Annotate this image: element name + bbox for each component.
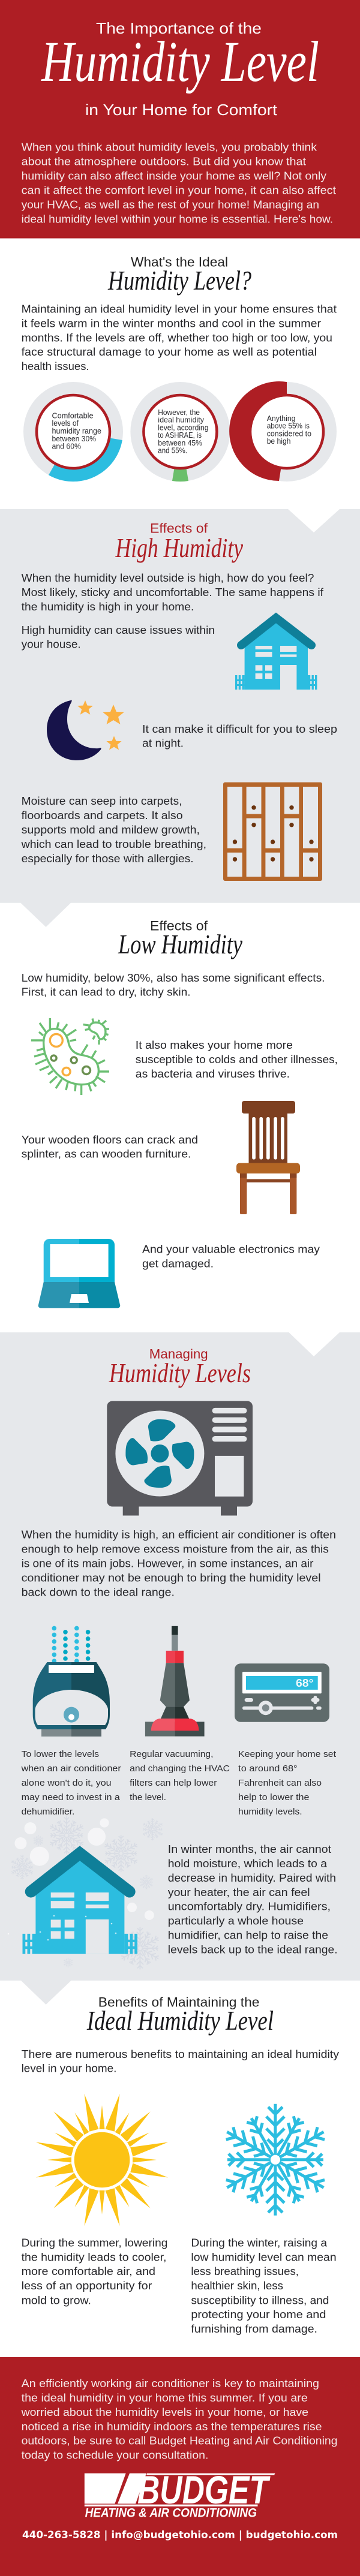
donut: comfortable range: levels of (52, 419, 79, 428)
closing text: the ideal humidity in your home this summer. If you are (22, 2392, 308, 2404)
icon: thermostat: 68° (296, 1677, 313, 1689)
text block: is one of its main jobs. However, in some instances, an air (22, 1558, 313, 1570)
text: moisture: especially for those with allergies. (22, 853, 194, 865)
donut: comfortable range: between 30% (52, 435, 96, 443)
text: moisture: supports mold and mildew growth, (22, 824, 200, 836)
closing text (21, 2378, 338, 2461)
panel: managing humidity levels (0, 1332, 360, 2005)
icon: floorboards (223, 783, 322, 881)
text block: the humidity is high in your home. (22, 601, 194, 613)
text block: There are numerous benefits to maintaining an ideal humidity (22, 2048, 339, 2060)
donut: comfortable range: Comfortable (52, 411, 94, 420)
text: sleep: It can make it difficult for you to sleep (142, 723, 337, 735)
text: sleep (142, 723, 337, 750)
caption: dehumidifier: dehumidifier. (22, 1807, 74, 1817)
text: winter months (168, 1843, 338, 1956)
caption: vacuuming: and changing the HVAC (130, 1764, 230, 1774)
text: sleep: at night. (142, 738, 184, 750)
closing text: An efficiently working air conditioner is key to maintaining (22, 2378, 319, 2390)
heading: What's the Ideal (131, 255, 228, 270)
text block: health issues. (22, 360, 89, 372)
panel: effects of low humidity (22, 918, 338, 1308)
heading: Managing (149, 1347, 208, 1362)
text block: level in your home. (22, 2063, 116, 2075)
heading (118, 918, 242, 959)
caption: vacuuming (130, 1749, 230, 1802)
logo: Budget Heating & Air Conditioning (85, 2467, 275, 2520)
heading: Effects of (150, 521, 208, 536)
closing text: worried about the humidity levels in your home, or have (21, 2406, 308, 2418)
text: winter benefit: healthier skin, less (191, 2280, 283, 2292)
text: electronics (142, 1244, 320, 1270)
caption: thermostat: help to lower the (238, 1792, 310, 1802)
heading: Effects of (150, 918, 208, 933)
text: summer benefit: mold to grow. (22, 2294, 91, 2306)
panel: effects of high humidity (0, 509, 360, 927)
text: winter benefit: protecting your home and (191, 2309, 326, 2321)
panel: benefits (22, 1994, 339, 2335)
text block (22, 2048, 339, 2075)
text: illnesses: It also makes your home more (136, 1039, 293, 1051)
icon: chair (236, 1101, 300, 1214)
text: moisture: Moisture can seep into carpets, (22, 795, 182, 807)
text: winter months: In winter months, the air cannot (168, 1843, 331, 1855)
text block: back down to the ideal range. (22, 1586, 175, 1598)
donut: comfortable range: and 60% (52, 443, 81, 451)
text: winter months: humidifier, can help to raise the (168, 1930, 328, 1942)
text block (22, 572, 324, 613)
icon: dehumidifier (33, 1626, 110, 1737)
donut: high humidity (229, 381, 337, 482)
text: moisture (21, 795, 206, 865)
text: summer benefit (22, 2237, 167, 2306)
donut: high humidity: above 55% is (267, 422, 310, 431)
donut: ideal range: level, according (158, 423, 209, 432)
donut: ideal range: However, the (158, 408, 200, 417)
caption: thermostat: Fahrenheit can also (238, 1778, 322, 1788)
caption: dehumidifier: may need to invest in a (22, 1792, 120, 1802)
heading (107, 255, 251, 296)
text: winter benefit: low humidity level can mean (191, 2251, 337, 2263)
caption: dehumidifier: To lower the levels (22, 1749, 99, 1759)
intro text (22, 142, 336, 225)
intro text: about the atmosphere outdoors. But did you know that (22, 156, 306, 168)
text block: face structural damage to your home as well as potential (22, 346, 317, 358)
heading: Low Humidity (118, 929, 242, 959)
text: summer benefit: the humidity leads to cooler, (22, 2251, 166, 2263)
title: The Importance of the (96, 19, 262, 37)
text block: Low humidity, below 30%, also has some significant effects. (22, 972, 325, 984)
donut: ideal range: ideal humidity (158, 416, 205, 425)
donut: comfortable range: humidity range (52, 427, 101, 435)
panel: intro header (0, 0, 360, 239)
intro text: When you think about humidity levels, you probably think (22, 142, 317, 154)
donut: high humidity: considered to (267, 429, 311, 438)
icon: thermostat (235, 1663, 329, 1722)
closing text: today to schedule your consultation. (22, 2449, 208, 2461)
icon: vacuum (145, 1626, 205, 1737)
text: issues within house: your house. (22, 639, 81, 651)
closing text: outdoors, be sure to call Budget Heating and Air Conditioning (22, 2435, 338, 2447)
text: winter months: decrease in humidity. Paired with (168, 1872, 336, 1884)
heading: Humidity Level? (107, 265, 251, 296)
text: summer benefit: less of an opportunity for (22, 2280, 152, 2292)
text: summer benefit: During the summer, lowering (22, 2237, 167, 2249)
text block: it feels warm in the winter months and cool in the summer (22, 317, 321, 329)
logo: Budget Heating & Air Conditioning: HEATING & AIR CONDITIONING (85, 2506, 257, 2520)
heading (109, 1347, 251, 1388)
intro text: humidity can also affect inside your home as well? Not only (22, 170, 326, 182)
text: electronics: get damaged. (142, 1258, 214, 1270)
title: in Your Home for Comfort (85, 101, 278, 119)
icon: laptop (38, 1239, 120, 1308)
icon: snowy house (8, 1816, 163, 1969)
icon: snowflake (223, 2104, 328, 2216)
text: winter benefit: furnishing from damage. (191, 2323, 317, 2335)
heading: High Humidity (115, 532, 243, 563)
caption: thermostat: Keeping your home set (238, 1749, 337, 1759)
donut: high humidity: be high (267, 437, 291, 446)
text: electronics: And your valuable electronics may (142, 1244, 320, 1256)
icon: sun (35, 2093, 169, 2227)
text: winter months: uncomfortably dry. Humidifiers, (168, 1901, 331, 1913)
caption: thermostat: to around 68° (238, 1764, 298, 1774)
text: winter benefit (191, 2237, 337, 2335)
text block (22, 1529, 336, 1598)
caption: vacuuming: Regular vacuuming, (130, 1749, 214, 1759)
text block: When the humidity is high, an efficient air conditioner is often (22, 1529, 336, 1541)
text: moisture: floorboards and carpets. It also (22, 809, 183, 821)
text block (22, 972, 325, 998)
intro text: can it affect the comfort level in your home, it can also affect (22, 184, 336, 196)
caption: dehumidifier: alone won't do it, you (22, 1778, 112, 1788)
caption: dehumidifier: when an air conditioner (21, 1764, 121, 1774)
donut: ideal range (130, 382, 230, 482)
icon: air conditioner (107, 1401, 253, 1516)
icon: bacteria (31, 1018, 109, 1095)
text block: First, it can lead to dry, itchy skin. (22, 986, 191, 998)
text: winter benefit: During the winter, raising a (191, 2237, 328, 2249)
text: moisture: which can lead to trouble breathing, (21, 838, 206, 850)
caption: thermostat: humidity levels. (238, 1807, 302, 1817)
caption: thermostat (238, 1749, 337, 1817)
donut: comfortable range (23, 382, 123, 482)
donut: high humidity: Anything (267, 414, 296, 423)
caption: vacuuming: the level. (130, 1792, 166, 1802)
panel: what's the ideal humidity level (22, 255, 337, 482)
text block: When the humidity level outside is high, how do you feel? (22, 572, 314, 584)
text block: enough to help remove excess moisture from the air, as this (22, 1543, 329, 1555)
text block (22, 303, 337, 372)
caption: vacuuming: filters can help lower (130, 1778, 217, 1788)
text: winter benefit: less breathing issues, (191, 2265, 299, 2277)
text: wood: Your wooden floors can crack and (22, 1134, 198, 1146)
donut: ideal range: and 55%. (158, 447, 187, 455)
text: summer benefit: more comfortable air, and (22, 2265, 155, 2277)
caption: dehumidifier (21, 1749, 121, 1817)
icon: house (235, 618, 317, 690)
text: winter benefit: susceptibility to illness, and (191, 2294, 329, 2306)
text: illnesses: susceptible to colds and other illnesses, (136, 1054, 338, 1066)
heading: Benefits of Maintaining the (98, 1994, 260, 2009)
heading (115, 521, 243, 563)
icon: moon and stars (47, 700, 124, 760)
text block: conditioner may not be enough to bring the humidity level (22, 1572, 321, 1584)
title (40, 19, 319, 119)
donut: ideal range: to ASHRAE, is (158, 431, 202, 440)
logo: Budget Heating & Air Conditioning: BUDGET (137, 2467, 271, 2512)
text: issues within house (22, 624, 215, 651)
intro text: ideal humidity level within your home is essential. Here's how. (22, 213, 333, 225)
text block: Maintaining an ideal humidity level in your home ensures that (22, 303, 337, 315)
intro text: your HVAC, as well as the rest of your home! Managing an (22, 198, 319, 210)
text: winter months: particularly a whole house (168, 1915, 304, 1927)
text block: Most likely, sticky and uncomfortable. The same happens if (22, 586, 324, 598)
text block: months. If the levels are off, whether too high or too low, you (22, 332, 332, 344)
text: wood (22, 1134, 198, 1160)
contact line: 440-263-5828 | info@budgetohio.com | budgetohio.com (22, 2529, 338, 2541)
panel: footer (0, 2357, 360, 2576)
text: illnesses: as bacteria and viruses thrive. (136, 1068, 290, 1080)
text: winter months: levels back up to the ideal range. (168, 1944, 338, 1956)
text: wood: splinter, as can wooden furniture. (22, 1148, 191, 1160)
closing text: noticed a rise in humidity indoors as the temperatures rise (22, 2421, 322, 2433)
heading (86, 1994, 274, 2036)
heading: Humidity Levels (109, 1358, 251, 1388)
text: winter months: hold moisture, which leads to a (168, 1858, 328, 1870)
heading: Ideal Humidity Level (86, 2005, 274, 2036)
text: winter months: your heater, the air can feel (168, 1886, 310, 1898)
text: illnesses (136, 1039, 338, 1080)
text: issues within house: High humidity can cause issues within (22, 624, 215, 636)
donut: ideal range: between 45% (158, 439, 202, 447)
